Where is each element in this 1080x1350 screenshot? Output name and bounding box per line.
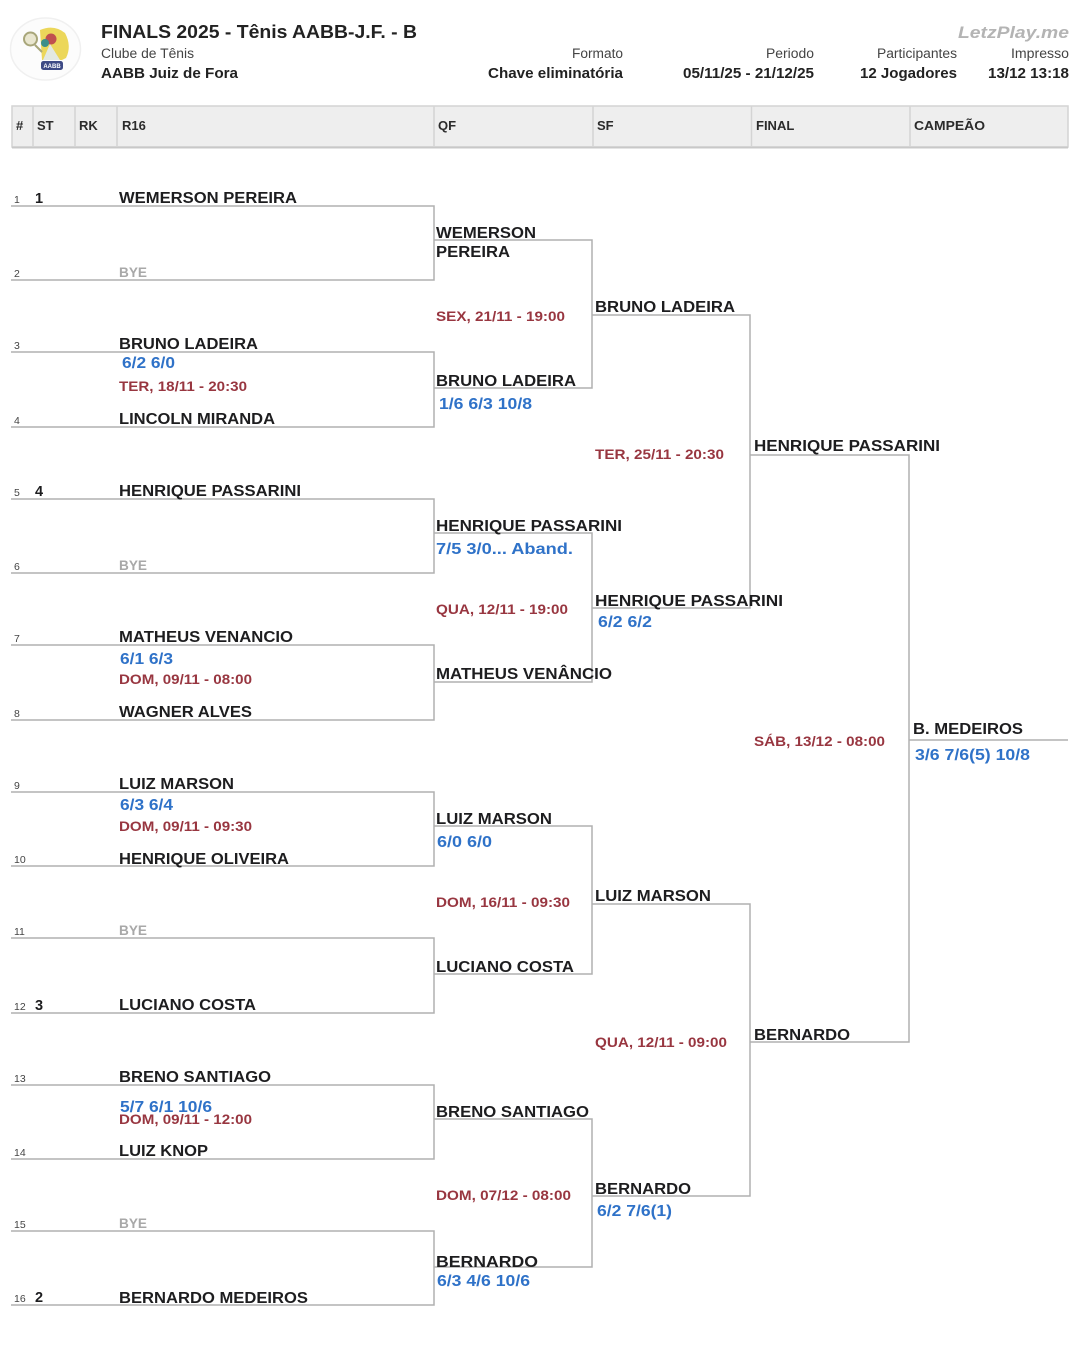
final players and date <box>754 438 940 1044</box>
round of 16 players: LUCIANO COSTA <box>119 997 256 1014</box>
meta: format <box>488 46 624 82</box>
seeds: 2 <box>35 1290 43 1306</box>
seeds: 4 <box>35 484 43 500</box>
round of 16 scores and dates: 6/2 6/0 <box>122 355 175 372</box>
round of 16 players: BRUNO LADEIRA <box>119 336 258 353</box>
quarterfinal players, scores and dates: DOM, 16/11 - 09:30 <box>436 894 570 910</box>
logo: AABB tennis club badge <box>10 18 80 80</box>
table header: RK <box>79 118 98 133</box>
bracket positions: 11 <box>14 926 25 938</box>
round of 16 players: HENRIQUE PASSARINI <box>119 483 301 500</box>
quarterfinal players, scores and dates: LUCIANO COSTA <box>436 959 574 976</box>
bracket positions: 4 <box>14 415 20 427</box>
round of 16 players: WEMERSON PEREIRA <box>119 190 297 207</box>
bracket lines <box>11 206 1068 1305</box>
round of 16 players: LINCOLN MIRANDA <box>119 411 275 428</box>
club info <box>101 46 239 82</box>
quarterfinal players, scores and dates: DOM, 07/12 - 08:00 <box>436 1187 571 1203</box>
table header: # <box>16 118 24 133</box>
bracket positions: 12 <box>14 1001 26 1013</box>
meta: period: Periodo <box>766 46 814 61</box>
champion <box>913 721 1030 764</box>
round of 16 players <box>119 190 308 1307</box>
bracket positions: 6 <box>14 561 20 573</box>
semifinal players, scores and dates: TER, 25/11 - 20:30 <box>595 446 724 462</box>
quarterfinal players, scores and dates: SEX, 21/11 - 19:00 <box>436 308 565 324</box>
table header: QF <box>438 118 456 133</box>
semifinal players, scores and dates: BERNARDO <box>595 1181 691 1198</box>
round of 16 scores and dates <box>119 355 252 1127</box>
meta: printed: 13/12 13:18 <box>988 66 1069 82</box>
meta: format: Chave eliminatória <box>488 66 624 82</box>
bracket positions: 1 <box>14 194 20 206</box>
semifinal players, scores and dates: 6/2 6/2 <box>598 614 652 631</box>
meta: participants: 12 Jogadores <box>860 66 957 82</box>
bracket positions: 9 <box>14 780 20 792</box>
meta: period <box>683 46 814 82</box>
bracket positions: 3 <box>14 340 20 352</box>
round of 16 scores and dates: DOM, 09/11 - 08:00 <box>119 671 252 687</box>
champion: B. MEDEIROS <box>913 721 1023 738</box>
quarterfinal players, scores and dates: PEREIRA <box>436 244 510 261</box>
champion: 3/6 7/6(5) 10/8 <box>915 747 1030 764</box>
table header: R16 <box>122 118 146 133</box>
club info: Clube de Tênis <box>101 46 194 61</box>
quarterfinal players, scores and dates: 6/0 6/0 <box>437 834 492 851</box>
table header: SF <box>597 118 614 133</box>
round of 16 players: BRENO SANTIAGO <box>119 1069 271 1086</box>
quarterfinal players, scores and dates: BERNARDO <box>436 1254 538 1271</box>
round of 16 players: BYE <box>119 1216 147 1231</box>
semifinal players, scores and dates: LUIZ MARSON <box>595 888 711 905</box>
bracket positions: 10 <box>14 854 26 866</box>
quarterfinal players, scores and dates: 1/6 6/3 10/8 <box>439 396 532 413</box>
meta: participants: Participantes <box>877 46 957 61</box>
quarterfinal players, scores and dates: MATHEUS VENÂNCIO <box>436 664 612 683</box>
brand: LetzPlay.me: LetzPlay.me <box>958 23 1069 42</box>
quarterfinal players, scores and dates: 6/3 4/6 10/6 <box>437 1273 530 1290</box>
title: FINALS 2025 - Tênis AABB-J.F. - B <box>101 22 417 42</box>
seeds: 3 <box>35 998 43 1014</box>
table header <box>12 106 1068 148</box>
quarterfinal players, scores and dates: QUA, 12/11 - 19:00 <box>436 601 568 617</box>
semifinal players, scores and dates: HENRIQUE PASSARINI <box>595 593 783 610</box>
bracket positions: 8 <box>14 708 20 720</box>
meta: printed <box>988 46 1069 82</box>
quarterfinal players, scores and dates <box>436 225 622 1290</box>
round of 16 players: LUIZ KNOP <box>119 1143 208 1160</box>
table header: ST <box>37 118 54 133</box>
round of 16 players: BYE <box>119 558 147 573</box>
meta: period: 05/11/25 - 21/12/25 <box>683 66 814 82</box>
round of 16 scores and dates: TER, 18/11 - 20:30 <box>119 378 247 394</box>
round of 16 scores and dates: 5/7 6/1 10/6 <box>120 1099 212 1116</box>
meta: participants <box>860 46 957 82</box>
bracket positions: 16 <box>14 1293 26 1305</box>
meta: format: Formato <box>572 46 623 61</box>
bracket positions <box>14 194 26 1305</box>
quarterfinal players, scores and dates: LUIZ MARSON <box>436 811 552 828</box>
round of 16 scores and dates: DOM, 09/11 - 12:00 <box>119 1111 252 1127</box>
bracket positions: 5 <box>14 487 20 499</box>
table header: FINAL <box>756 118 794 133</box>
bracket positions: 15 <box>14 1219 26 1231</box>
round of 16 players: BYE <box>119 923 147 938</box>
round of 16 players: HENRIQUE OLIVEIRA <box>119 851 289 868</box>
quarterfinal players, scores and dates: 7/5 3/0... Aband. <box>436 541 573 558</box>
round of 16 scores and dates: DOM, 09/11 - 09:30 <box>119 818 252 834</box>
quarterfinal players, scores and dates: HENRIQUE PASSARINI <box>436 518 622 535</box>
semifinal players, scores and dates: QUA, 12/11 - 09:00 <box>595 1034 727 1050</box>
quarterfinal players, scores and dates: BRENO SANTIAGO <box>436 1104 589 1121</box>
seeds <box>35 191 43 1306</box>
round of 16 players: LUIZ MARSON <box>119 776 234 793</box>
round of 16 players: BERNARDO MEDEIROS <box>119 1290 308 1307</box>
semifinal players, scores and dates: BRUNO LADEIRA <box>595 299 735 316</box>
quarterfinal players, scores and dates: BRUNO LADEIRA <box>436 373 576 390</box>
bracket positions: 13 <box>14 1073 26 1085</box>
final players and date: SÁB, 13/12 - 08:00 <box>754 733 885 749</box>
final players and date: HENRIQUE PASSARINI <box>754 438 940 455</box>
round of 16 scores and dates: 6/1 6/3 <box>120 651 173 668</box>
quarterfinal players, scores and dates: WEMERSON <box>436 225 536 242</box>
bracket positions: 7 <box>14 633 20 645</box>
bracket positions: 2 <box>14 268 20 280</box>
club info: AABB Juiz de Fora <box>101 66 239 82</box>
logo: AABB tennis club badge: AABB <box>43 64 61 70</box>
semifinal players, scores and dates <box>595 299 783 1220</box>
semifinal players, scores and dates: 6/2 7/6(1) <box>597 1203 672 1220</box>
round of 16 players: MATHEUS VENANCIO <box>119 629 293 646</box>
final players and date: BERNARDO <box>754 1027 850 1044</box>
meta: printed: Impresso <box>1011 46 1069 61</box>
round of 16 players: WAGNER ALVES <box>119 704 252 721</box>
round of 16 players: BYE <box>119 265 147 280</box>
table header: CAMPEÃO <box>914 118 985 133</box>
seeds: 1 <box>35 191 43 207</box>
round of 16 scores and dates: 6/3 6/4 <box>120 797 173 814</box>
bracket positions: 14 <box>14 1147 26 1159</box>
